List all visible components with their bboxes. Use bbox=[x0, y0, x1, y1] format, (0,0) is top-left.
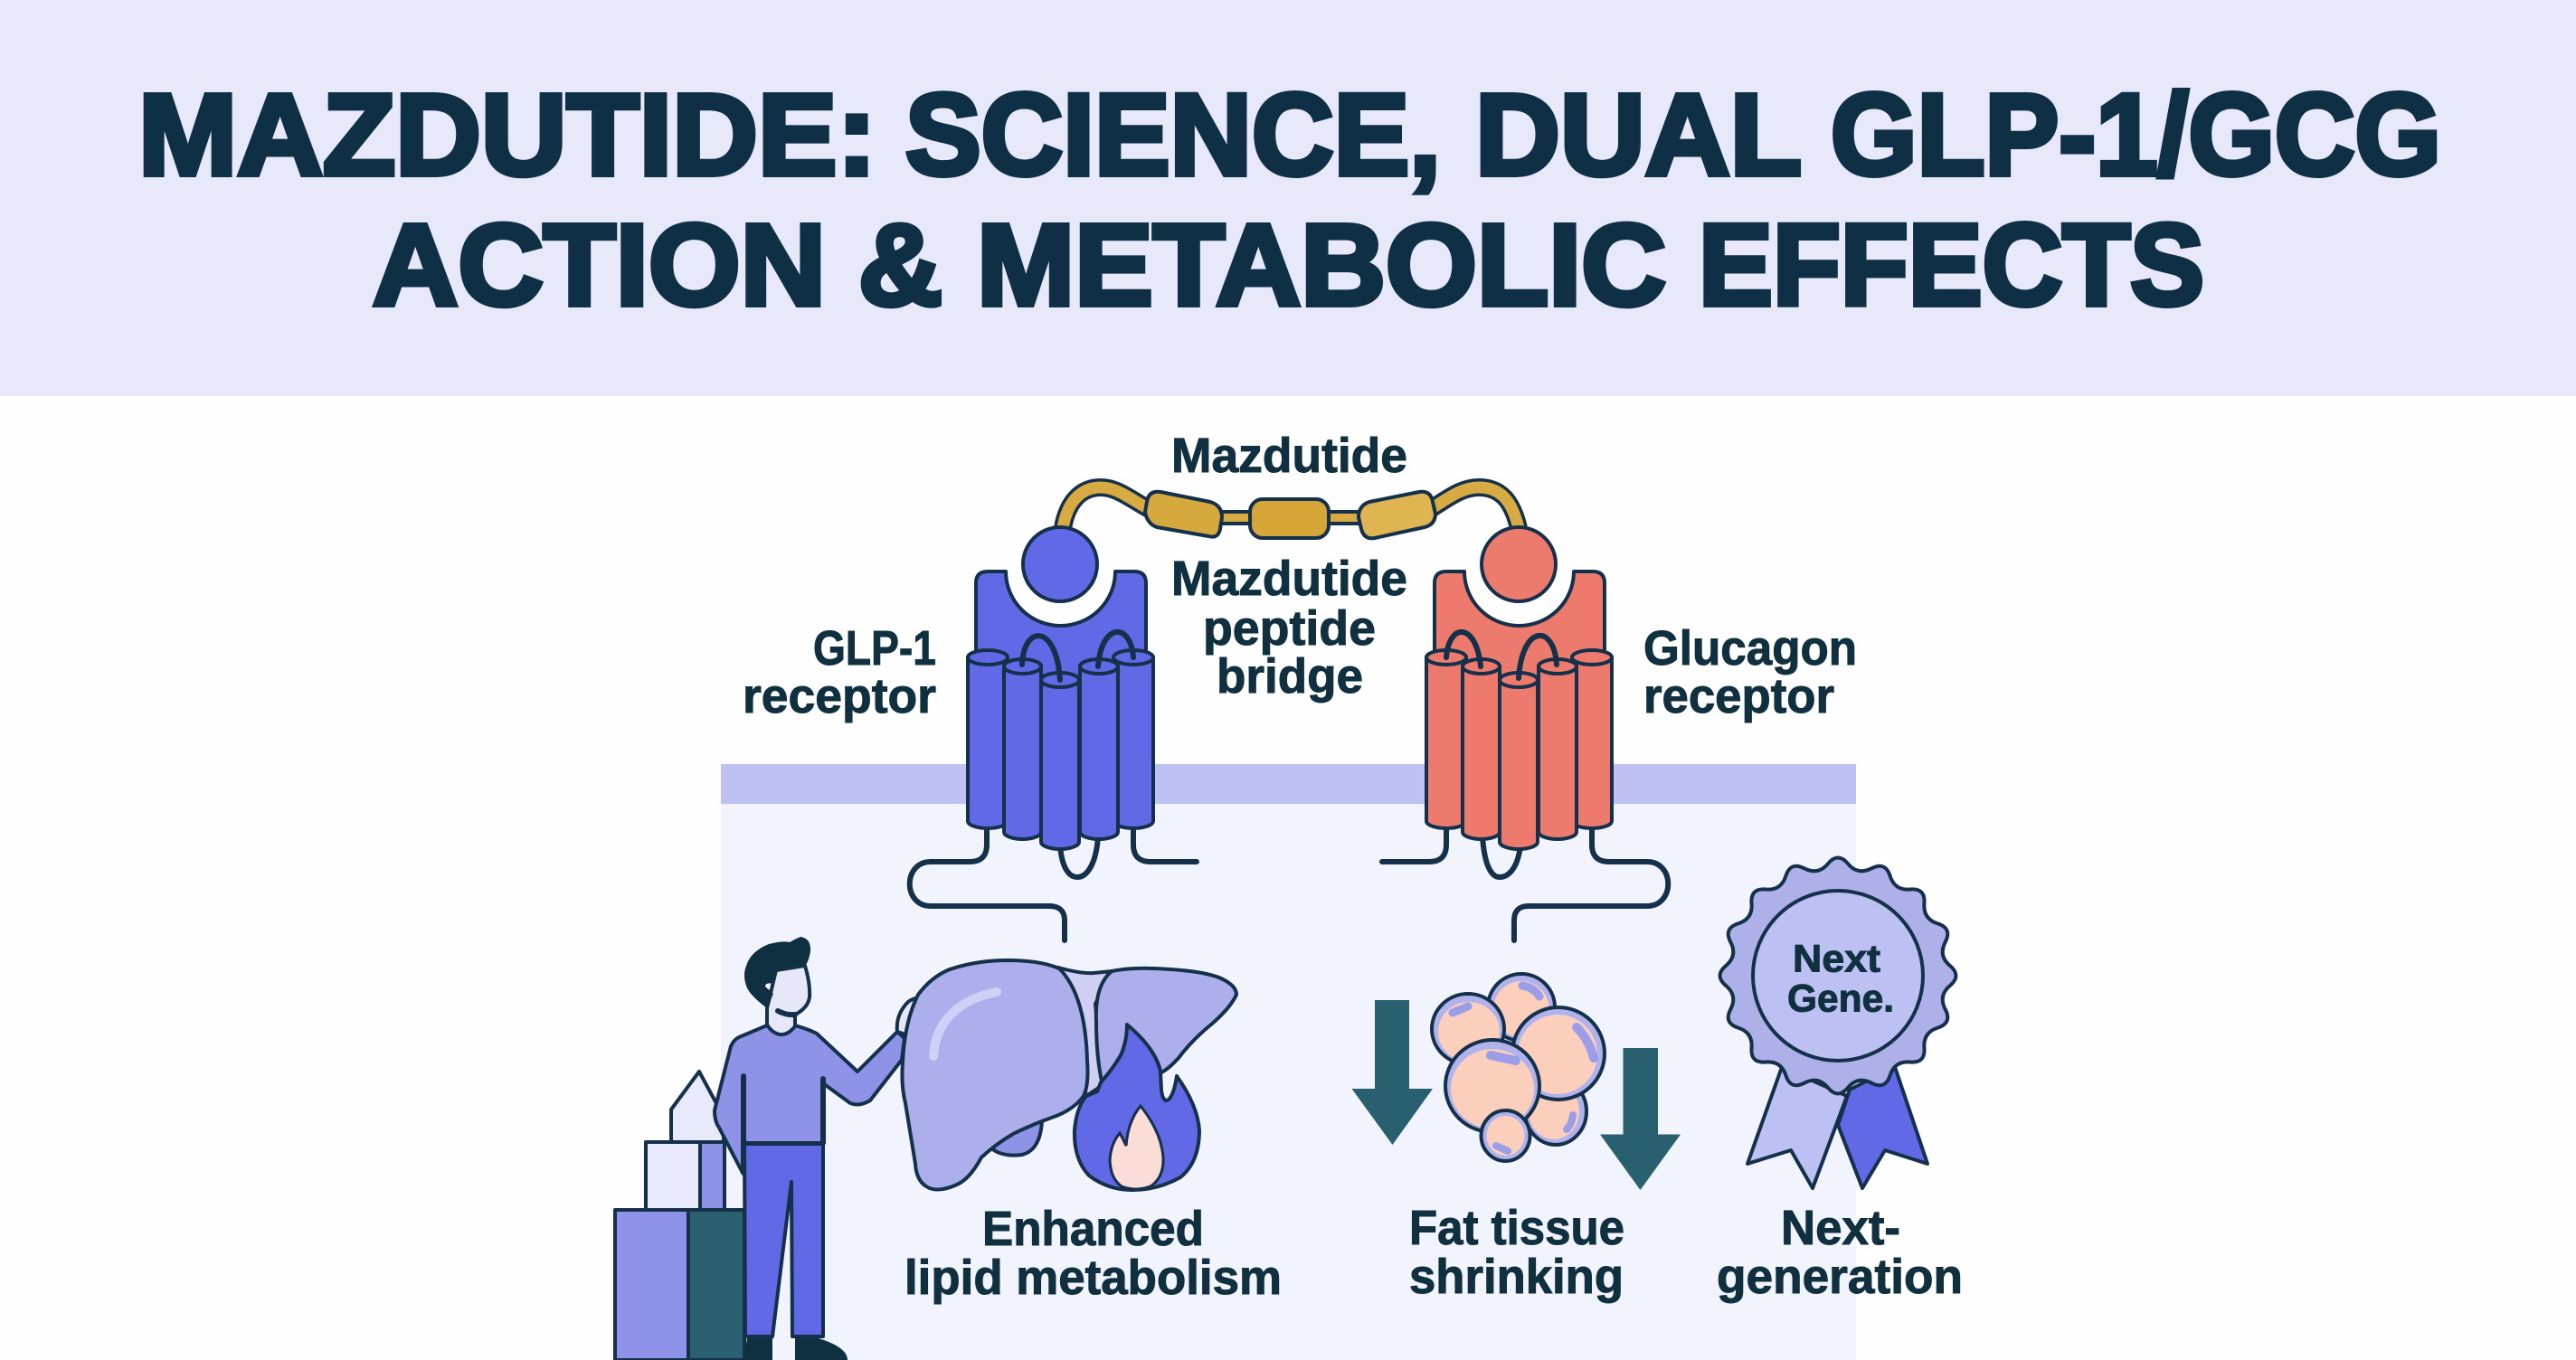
label: Mazdutide: Mazdutide bbox=[1171, 429, 1407, 483]
cell lower right bbox=[1525, 1078, 1586, 1145]
icon: flame bbox=[1075, 1025, 1199, 1190]
label: Mazdutide peptide bridge bbox=[1171, 552, 1407, 704]
panel: cell interior bbox=[721, 804, 1856, 1360]
cell small bbox=[1482, 1110, 1530, 1161]
Glucagon receptor bbox=[1382, 527, 1668, 940]
label: Enhanced lipid metabolism bbox=[904, 1202, 1282, 1305]
person bbox=[715, 937, 926, 1360]
title: ACTION bbox=[373, 201, 826, 330]
smile bbox=[778, 1011, 795, 1015]
label: Mazdutide peptide bridge: peptide bbox=[1203, 601, 1376, 656]
ligand circle: GLP-1 bbox=[1023, 527, 1097, 601]
label: GLP-1 receptor bbox=[743, 621, 936, 723]
icon: liver bbox=[902, 960, 1236, 1190]
transmembrane helices bbox=[1426, 650, 1612, 849]
header band bbox=[0, 0, 2576, 396]
stacked boxes with arrow bbox=[615, 1072, 744, 1360]
rosette text bbox=[1787, 937, 1894, 1020]
cell top bbox=[1488, 974, 1555, 1041]
label: Next-generation: Next- bbox=[1781, 1201, 1900, 1255]
label: Glucagon receptor bbox=[1643, 621, 1857, 723]
neck and face bbox=[767, 966, 810, 1034]
intracellular lines bbox=[910, 828, 1197, 940]
label: Enhanced lipid metabolism: Enhanced bbox=[982, 1202, 1204, 1256]
cell front bbox=[1445, 1040, 1539, 1132]
extracellular loops bbox=[1022, 632, 1133, 680]
label: Glucagon receptor: receptor bbox=[1643, 669, 1834, 723]
label: GLP-1 receptor: GLP-1 bbox=[813, 621, 936, 675]
label: Mazdutide peptide bridge: bridge bbox=[1217, 649, 1363, 704]
label: GLP-1 receptor: receptor bbox=[743, 669, 936, 723]
receptor body bbox=[976, 571, 1146, 696]
title bbox=[138, 71, 2441, 330]
trousers bbox=[744, 1144, 823, 1336]
label: Next-generation bbox=[1717, 1201, 1963, 1304]
label: Glucagon receptor: Glucagon bbox=[1643, 621, 1857, 675]
rosette text: Gene. bbox=[1787, 977, 1894, 1020]
arrow: left down arrow bbox=[1351, 1000, 1433, 1145]
highlight bbox=[933, 992, 997, 1056]
label: Fat tissue shrinking: Fat tissue bbox=[1409, 1201, 1624, 1255]
arrow: right down arrow bbox=[1600, 1048, 1681, 1190]
cell left bbox=[1432, 994, 1504, 1064]
title: EFFECTS bbox=[1699, 201, 2204, 330]
extracellular loops bbox=[1446, 632, 1557, 678]
title: DUAL bbox=[1475, 71, 1802, 200]
ligand circle: glucagon bbox=[1482, 527, 1556, 601]
title: SCIENCE, bbox=[905, 71, 1441, 200]
label: Enhanced lipid metabolism: lipid metabolism bbox=[904, 1251, 1282, 1305]
title: MAZDUTIDE: bbox=[138, 71, 876, 200]
rosette text: Next bbox=[1793, 937, 1880, 980]
ribbon tails bbox=[1838, 1067, 1927, 1188]
gallbladder bbox=[990, 1121, 1042, 1156]
transmembrane helices bbox=[968, 650, 1153, 849]
hair bbox=[744, 937, 810, 1008]
torso and arm bbox=[715, 1025, 904, 1173]
peptide molecule bbox=[1063, 487, 1519, 538]
label: Next-generation: generation bbox=[1717, 1250, 1963, 1304]
icon: fat cells bbox=[1432, 974, 1605, 1161]
connecting tissue bbox=[1058, 968, 1112, 1096]
icon: next generation badge bbox=[1720, 858, 1956, 1188]
GLP-1 receptor bbox=[910, 527, 1197, 940]
receptor body bbox=[1435, 571, 1605, 696]
label: Mazdutide peptide bridge: Mazdutide bbox=[1171, 552, 1407, 606]
title: & bbox=[858, 201, 942, 330]
shoes bbox=[743, 1338, 848, 1360]
intracellular lines bbox=[1382, 828, 1668, 940]
label: Fat tissue shrinking bbox=[1409, 1201, 1624, 1304]
hand bbox=[897, 997, 926, 1040]
cell membrane bbox=[721, 764, 1856, 804]
inner flame bbox=[1110, 1106, 1163, 1189]
rosette centre bbox=[1753, 891, 1923, 1061]
left lobe bbox=[1096, 968, 1236, 1085]
cell right bbox=[1512, 1007, 1605, 1100]
title: GLP-1/GCG bbox=[1831, 71, 2441, 200]
right lobe bbox=[902, 960, 1087, 1190]
label: Fat tissue shrinking: shrinking bbox=[1409, 1250, 1624, 1304]
torso inner lines bbox=[743, 1076, 823, 1173]
scalloped rosette bbox=[1720, 858, 1956, 1093]
title: METABOLIC bbox=[977, 201, 1666, 330]
